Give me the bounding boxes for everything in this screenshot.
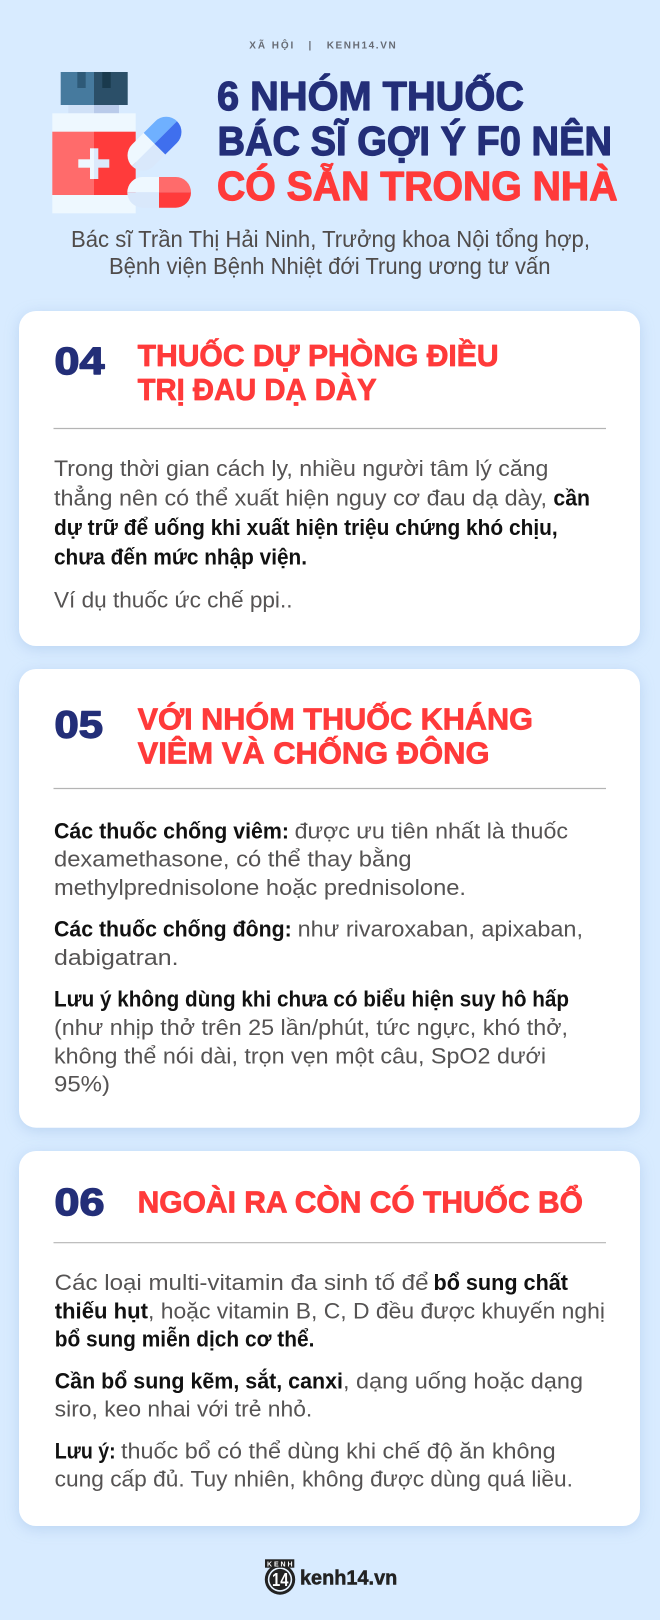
body text 04: Ví dụ thuốc ức chế ppi..	[54, 587, 292, 612]
body text 05: (như nhịp thở trên 25 lần/phút, tức ngực, khó thở,	[54, 1015, 568, 1040]
heading 04	[138, 337, 499, 407]
body text 06: siro, keo nhai với trẻ nhỏ.	[55, 1397, 312, 1422]
body text 06: , dạng uống hoặc dạng	[343, 1368, 583, 1393]
body text 05: Lưu ý không dùng khi chưa có biểu hiện suy hô hấp	[54, 987, 569, 1012]
body text 05: dabigatran.	[54, 945, 178, 970]
heading 04: TRỊ ĐAU DẠ DÀY	[138, 372, 377, 407]
subtitle: Bệnh viện Bệnh Nhiệt đới Trung ương tư vấn	[109, 253, 550, 279]
heading 04: THUỐC DỰ PHÒNG ĐIỀU	[138, 337, 499, 373]
title: CÓ SẴN TRONG NHÀ	[217, 163, 618, 209]
body text 04: dự trữ để uống khi xuất hiện triệu chứng khó chịu,	[54, 515, 558, 540]
logo badge: 14	[272, 1570, 288, 1590]
heading 05: VIÊM VÀ CHỐNG ĐÔNG	[138, 734, 490, 770]
body text 06: thiếu hụt	[55, 1298, 148, 1323]
body text 04: Trong thời gian cách ly, nhiều người tâm lý căng	[54, 456, 548, 481]
heading 06: NGOÀI RA CÒN CÓ THUỐC BỔ	[138, 1184, 583, 1220]
body text 05: không thể nói dài, trọn vẹn một câu, SpO2 dưới	[54, 1043, 546, 1068]
body text 06: cung cấp đủ. Tuy nhiên, không được dùng quá liều.	[55, 1467, 573, 1492]
body text 05	[54, 818, 583, 1097]
footer logo: kenh14.vn	[265, 1559, 397, 1595]
body text 05: được ưu tiên nhất là thuốc	[295, 818, 568, 843]
body text 06: bổ sung chất	[434, 1270, 568, 1295]
body text 06: thuốc bổ có thể dùng khi chế độ ăn không	[121, 1438, 556, 1463]
body text 04: chưa đến mức nhập viện.	[54, 544, 307, 569]
red capsule	[127, 177, 191, 208]
logo badge	[265, 1559, 295, 1595]
body text 04: cần	[553, 485, 590, 510]
body text 06: Cần bổ sung kẽm, sắt, canxi	[55, 1368, 343, 1393]
panel: 04 stomach medicine	[19, 311, 640, 646]
logo wordmark: kenh14.vn	[300, 1566, 397, 1589]
body text 04	[54, 456, 590, 612]
blue capsule	[121, 110, 188, 177]
title: BÁC SĨ GỢI Ý F0 NÊN	[218, 118, 612, 164]
subtitle	[71, 226, 590, 279]
source line: KENH14.VN	[327, 40, 396, 51]
number 06: 06	[54, 1182, 104, 1224]
body text 05: Các thuốc chống viêm:	[54, 818, 289, 843]
bottle body with red label	[52, 113, 136, 213]
title	[217, 73, 618, 209]
heading 05	[138, 700, 533, 770]
body text 06: bổ sung miễn dịch cơ thể.	[55, 1327, 314, 1352]
body text 05: dexamethasone, có thể thay bằng	[54, 847, 412, 872]
panel: 06 supplements	[19, 1151, 640, 1526]
number 04: 04	[54, 341, 104, 383]
source line: XÃ HỘI	[249, 38, 294, 51]
body text 06	[55, 1270, 605, 1492]
panel: 05 anti-inflammatory and anticoagulant	[19, 669, 640, 1128]
title: 6 NHÓM THUỐC	[217, 73, 524, 119]
body text 06: , hoặc vitamin B, C, D đều được khuyến nghị	[148, 1298, 605, 1323]
heading 05: VỚI NHÓM THUỐC KHÁNG	[138, 700, 533, 736]
logo badge: KENH	[267, 1561, 292, 1568]
body text 05: methylprednisolone hoặc prednisolone.	[54, 875, 466, 900]
source line	[249, 38, 396, 51]
bottle cap	[61, 72, 128, 113]
body text 06: Các loại multi-vitamin đa sinh tố để	[55, 1270, 428, 1295]
body text 05: Các thuốc chống đông:	[54, 917, 292, 942]
source line: |	[308, 40, 312, 51]
icon: medicine bottle with capsules	[52, 72, 191, 213]
body text 05: như rivaroxaban, apixaban,	[298, 917, 583, 942]
body text 04: thẳng nên có thể xuất hiện nguy cơ đau dạ dày,	[54, 485, 547, 510]
subtitle: Bác sĩ Trần Thị Hải Ninh, Trưởng khoa Nội tổng hợp,	[71, 226, 590, 252]
body text 05: 95%)	[54, 1072, 110, 1097]
number 05: 05	[54, 704, 103, 746]
body text 06: Lưu ý:	[55, 1438, 116, 1463]
